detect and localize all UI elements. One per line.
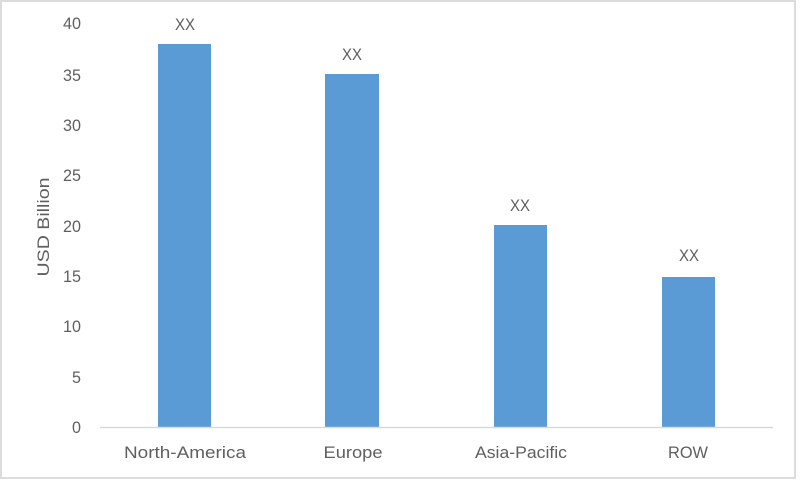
bar value labels: XX [510, 196, 530, 215]
x-axis category labels: Europe [324, 443, 382, 462]
y-axis tick labels: 0 [72, 418, 81, 437]
bar value labels: XX [679, 246, 699, 265]
x-axis category labels: Asia-Pacific [475, 443, 568, 462]
y-axis title: USD Billion [34, 178, 53, 276]
y-axis tick labels: 30 [63, 116, 81, 135]
x-axis category labels: North-America [124, 443, 247, 462]
x-axis category labels: ROW [668, 443, 708, 462]
y-axis tick labels: 40 [63, 14, 81, 33]
y-axis tick labels: 35 [63, 66, 81, 85]
y-axis tick labels [63, 14, 81, 437]
x-axis category labels [124, 443, 708, 462]
bars [158, 44, 715, 427]
y-axis tick labels: 20 [63, 217, 81, 236]
y-axis tick labels: 5 [72, 368, 81, 387]
bar value labels [175, 15, 699, 265]
bar value labels: XX [342, 45, 362, 64]
x-axis line [100, 426, 773, 428]
y-axis tick labels: 15 [63, 267, 81, 286]
bar value labels: XX [175, 15, 195, 34]
y-axis tick labels: 25 [63, 166, 81, 185]
y-axis tick labels: 10 [63, 317, 81, 336]
